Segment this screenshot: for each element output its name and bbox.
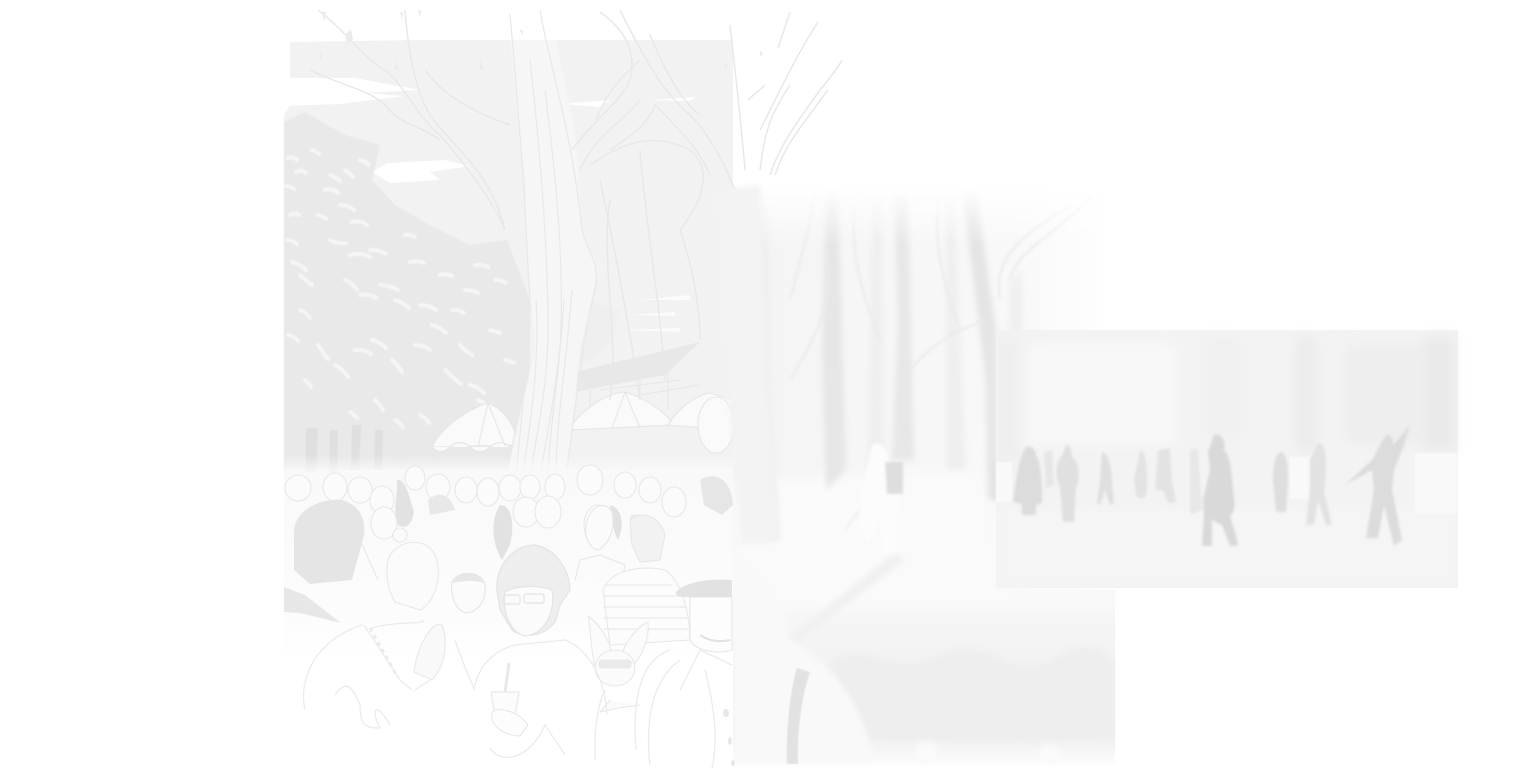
woman with glasses — [497, 545, 570, 636]
crowd background — [284, 455, 733, 770]
kiosk structure — [400, 372, 700, 465]
photo background — [996, 330, 1458, 588]
raised hand left — [414, 624, 445, 680]
tall right tree — [715, 185, 778, 545]
stone blocks — [996, 453, 1457, 513]
bench shapes at bottom — [915, 742, 1060, 764]
roof of kiosk — [575, 342, 700, 392]
sky — [284, 40, 733, 470]
avenue trees — [748, 190, 1024, 540]
hedge scallops — [830, 647, 1114, 740]
fog background — [733, 190, 1115, 764]
rabbit ear headband figure — [588, 616, 648, 712]
hooded figure foreground — [733, 552, 876, 764]
shadow on path — [780, 553, 905, 645]
drink cup with straw — [491, 663, 519, 722]
foliage highlights — [286, 150, 514, 428]
ground — [1000, 510, 1454, 584]
tree trunks in distance — [306, 425, 383, 480]
hand holding cup — [492, 710, 528, 736]
man in striped shirt — [603, 515, 690, 645]
panel: foggy avenue photo — [733, 185, 1115, 764]
small man — [452, 573, 485, 613]
crowd far heads — [285, 465, 686, 545]
man with dark head — [284, 500, 378, 623]
foreground body outlines — [303, 620, 732, 768]
dancers group — [1013, 425, 1410, 546]
main tree trunk — [505, 10, 598, 480]
bare branches — [310, 10, 842, 400]
figure in white with backpack — [845, 443, 903, 555]
woman with ponytail — [575, 506, 625, 590]
sky highlights — [284, 78, 695, 332]
avenue branches — [790, 190, 1092, 380]
leaves — [320, 10, 763, 70]
panel: dancers in the park photo — [996, 330, 1458, 588]
panel: crowd illustration under trees — [284, 10, 842, 770]
left foliage — [284, 112, 620, 480]
misty background trees — [996, 335, 1455, 465]
umbrellas — [432, 392, 734, 453]
dark hair accents — [395, 476, 733, 560]
top fog fade — [733, 185, 1115, 245]
buttons on jacket — [723, 709, 735, 766]
man with cap — [676, 580, 732, 652]
bun woman from behind — [387, 528, 438, 610]
